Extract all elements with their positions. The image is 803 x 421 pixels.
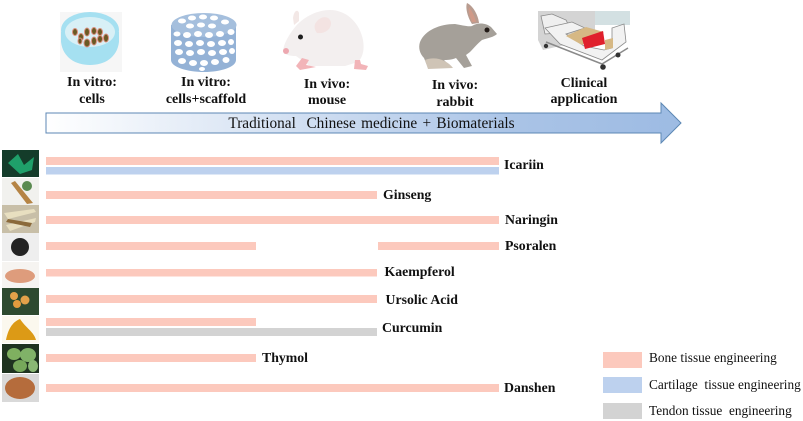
icon: white mouse bbox=[283, 10, 368, 70]
stage labels: application bbox=[551, 92, 618, 107]
stage labels: cells+scaffold bbox=[166, 92, 246, 107]
stage labels: In vitro: bbox=[67, 75, 117, 90]
compound labels: Curcumin bbox=[382, 320, 443, 335]
stage labels: rabbit bbox=[436, 95, 474, 110]
stage labels: In vivo: bbox=[304, 77, 350, 92]
legend: Bone tissue engineering bbox=[649, 350, 777, 365]
legend: Cartilage tissue engineering bbox=[649, 377, 801, 392]
compound labels: Ursolic Acid bbox=[386, 292, 458, 307]
stage labels: Clinical bbox=[561, 76, 607, 91]
compound labels: Ginseng bbox=[383, 187, 431, 202]
icon: brown rabbit bbox=[419, 3, 497, 69]
stage labels: mouse bbox=[308, 93, 346, 108]
legend bbox=[603, 350, 801, 419]
compound labels: Thymol bbox=[262, 350, 308, 365]
stage labels: In vivo: bbox=[432, 78, 478, 93]
icon: hospital bed bbox=[538, 11, 630, 70]
icon: cell culture dish bbox=[60, 12, 122, 72]
compound labels: Psoralen bbox=[505, 238, 557, 253]
compound labels: Icariin bbox=[504, 157, 544, 172]
chart: bars bbox=[46, 157, 499, 392]
compound labels: Kaempferol bbox=[384, 264, 455, 279]
stage labels: In vitro: bbox=[181, 75, 231, 90]
icon: porous scaffold bbox=[171, 13, 236, 72]
compound labels: Naringin bbox=[505, 212, 558, 227]
arrow: timeline: Traditional Chinese medicine + Biomaterials bbox=[228, 115, 515, 132]
stage labels bbox=[67, 75, 618, 110]
legend: Tendon tissue engineering bbox=[649, 403, 792, 418]
compound labels bbox=[262, 157, 558, 395]
stage labels: cells bbox=[79, 92, 105, 107]
icon: herb thumbnails bbox=[2, 150, 39, 402]
compound labels: Danshen bbox=[504, 380, 556, 395]
arrow: timeline bbox=[46, 103, 681, 143]
